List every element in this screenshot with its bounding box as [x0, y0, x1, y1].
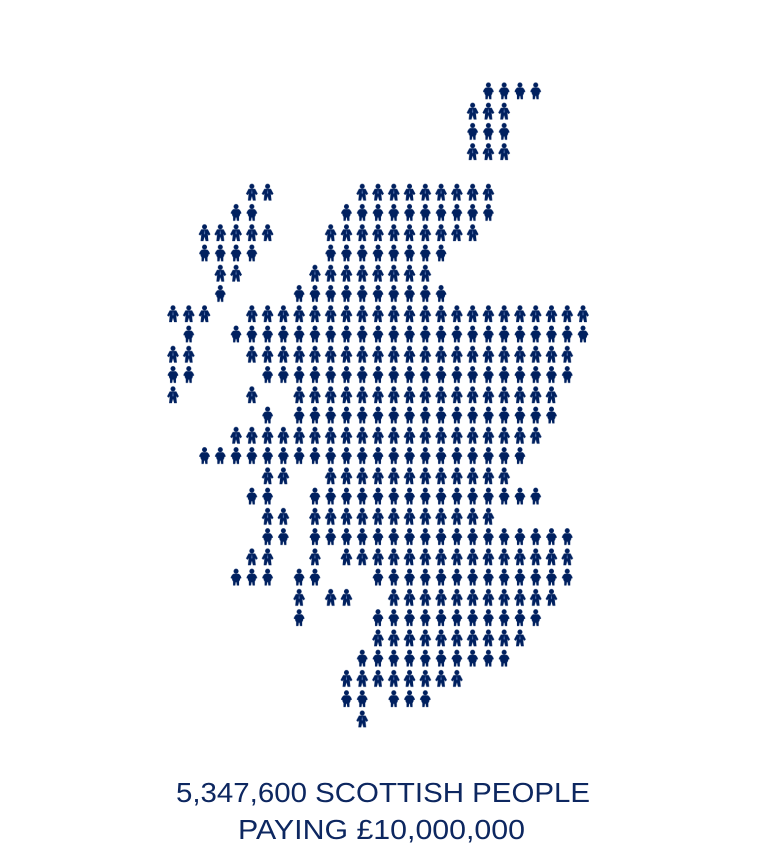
caption: 5,347,600 SCOTTISH PEOPLE — [176, 777, 590, 808]
caption — [176, 777, 590, 845]
icon group: mainland and western isles — [165, 182, 591, 729]
caption: PAYING £10,000,000 — [238, 814, 525, 845]
icon group: northern isles — [465, 81, 544, 162]
pictogram map of Scotland made of people icons — [165, 81, 591, 729]
